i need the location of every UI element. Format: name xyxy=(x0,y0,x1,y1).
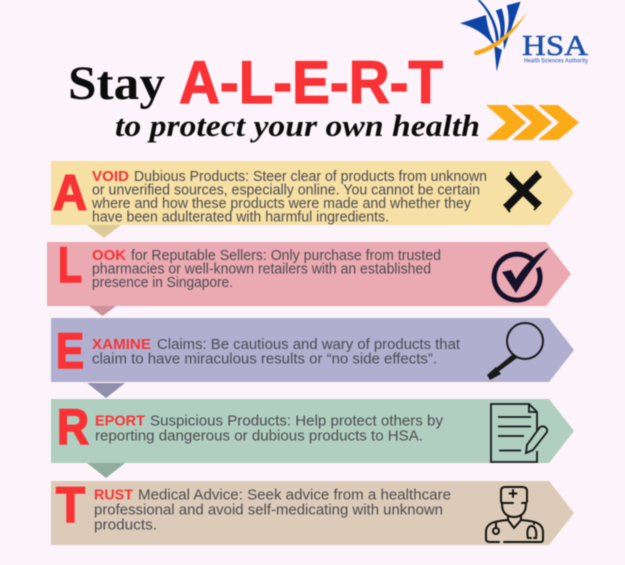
panel: R - Report xyxy=(51,399,574,478)
connector triangle xyxy=(87,225,121,238)
big letter R: R xyxy=(57,399,89,455)
title: A-L-E-R-T: A-L-E-R-T xyxy=(179,49,443,116)
panel: T - Trust xyxy=(51,477,574,545)
panel text: have been adulterated with harmful ingredients. xyxy=(92,208,389,226)
panel text: Suspicious Products: Help protect others by xyxy=(150,412,443,430)
panel text: professional and avoid self-medicating with unknown xyxy=(94,502,443,518)
big letter A: A xyxy=(53,165,87,221)
panel text: claim to have miraculous results or “no side effects”. xyxy=(92,350,437,368)
panel text: products. xyxy=(94,516,157,534)
panel: E - Examine xyxy=(51,318,574,398)
icon: check mark in circle xyxy=(494,248,549,300)
panel text: pharmacies or well-known retailers with an established xyxy=(92,260,431,278)
panel text: presence in Singapore. xyxy=(92,274,233,291)
panel text xyxy=(95,412,443,444)
big letter T: T xyxy=(56,477,85,533)
panel text: XAMINE xyxy=(92,336,151,353)
icon: magnifying glass xyxy=(487,323,543,380)
logo: HSA xyxy=(460,0,589,72)
connector triangle xyxy=(89,306,116,316)
logo wordmark: HSA xyxy=(522,31,589,62)
panel: L - Look xyxy=(47,237,571,316)
panel arrow background xyxy=(51,318,574,382)
panel arrow background xyxy=(51,161,574,225)
panel arrow background xyxy=(51,399,574,463)
panel text: where and how these products were made and whether they xyxy=(91,195,471,212)
panel text xyxy=(94,486,451,534)
panel arrow background xyxy=(47,242,571,306)
panel text xyxy=(91,168,487,226)
big letter E: E xyxy=(56,323,84,379)
panel text: OOK xyxy=(92,247,126,264)
big letter L: L xyxy=(58,237,82,293)
logo subtitle: Health Sciences Authority xyxy=(524,58,589,64)
panel text: or unverified sources, especially online. You cannot be certain xyxy=(92,182,480,198)
panel text: Dubious Products: Steer clear of products from unknown xyxy=(134,168,487,185)
panel arrow background xyxy=(51,481,574,545)
panel text: reporting dangerous or dubious products to HSA. xyxy=(95,428,423,444)
panel text: VOID xyxy=(92,168,129,185)
icon: doctor xyxy=(486,487,543,542)
icon: document with pencil xyxy=(491,404,547,462)
icon: triple chevron arrow xyxy=(486,105,579,140)
panel text: for Reputable Sellers: Only purchase from trusted xyxy=(131,247,441,264)
connector triangle xyxy=(87,463,125,478)
connector triangle xyxy=(87,383,125,398)
panel text: Medical Advice: Seek advice from a healthcare xyxy=(138,486,451,504)
panel text xyxy=(92,247,441,291)
title: Stay: Stay xyxy=(68,57,165,110)
icon: brush X xyxy=(504,171,541,212)
panel: A - Avoid xyxy=(51,161,574,238)
panel text xyxy=(92,336,461,368)
panel text: Claims: Be cautious and wary of products that xyxy=(157,336,461,353)
icon: HSA wing mark xyxy=(460,0,527,72)
panel text: RUST xyxy=(94,486,133,504)
subtitle: to protect your own health xyxy=(115,108,480,143)
panel text: EPORT xyxy=(95,412,145,430)
title xyxy=(68,49,480,143)
